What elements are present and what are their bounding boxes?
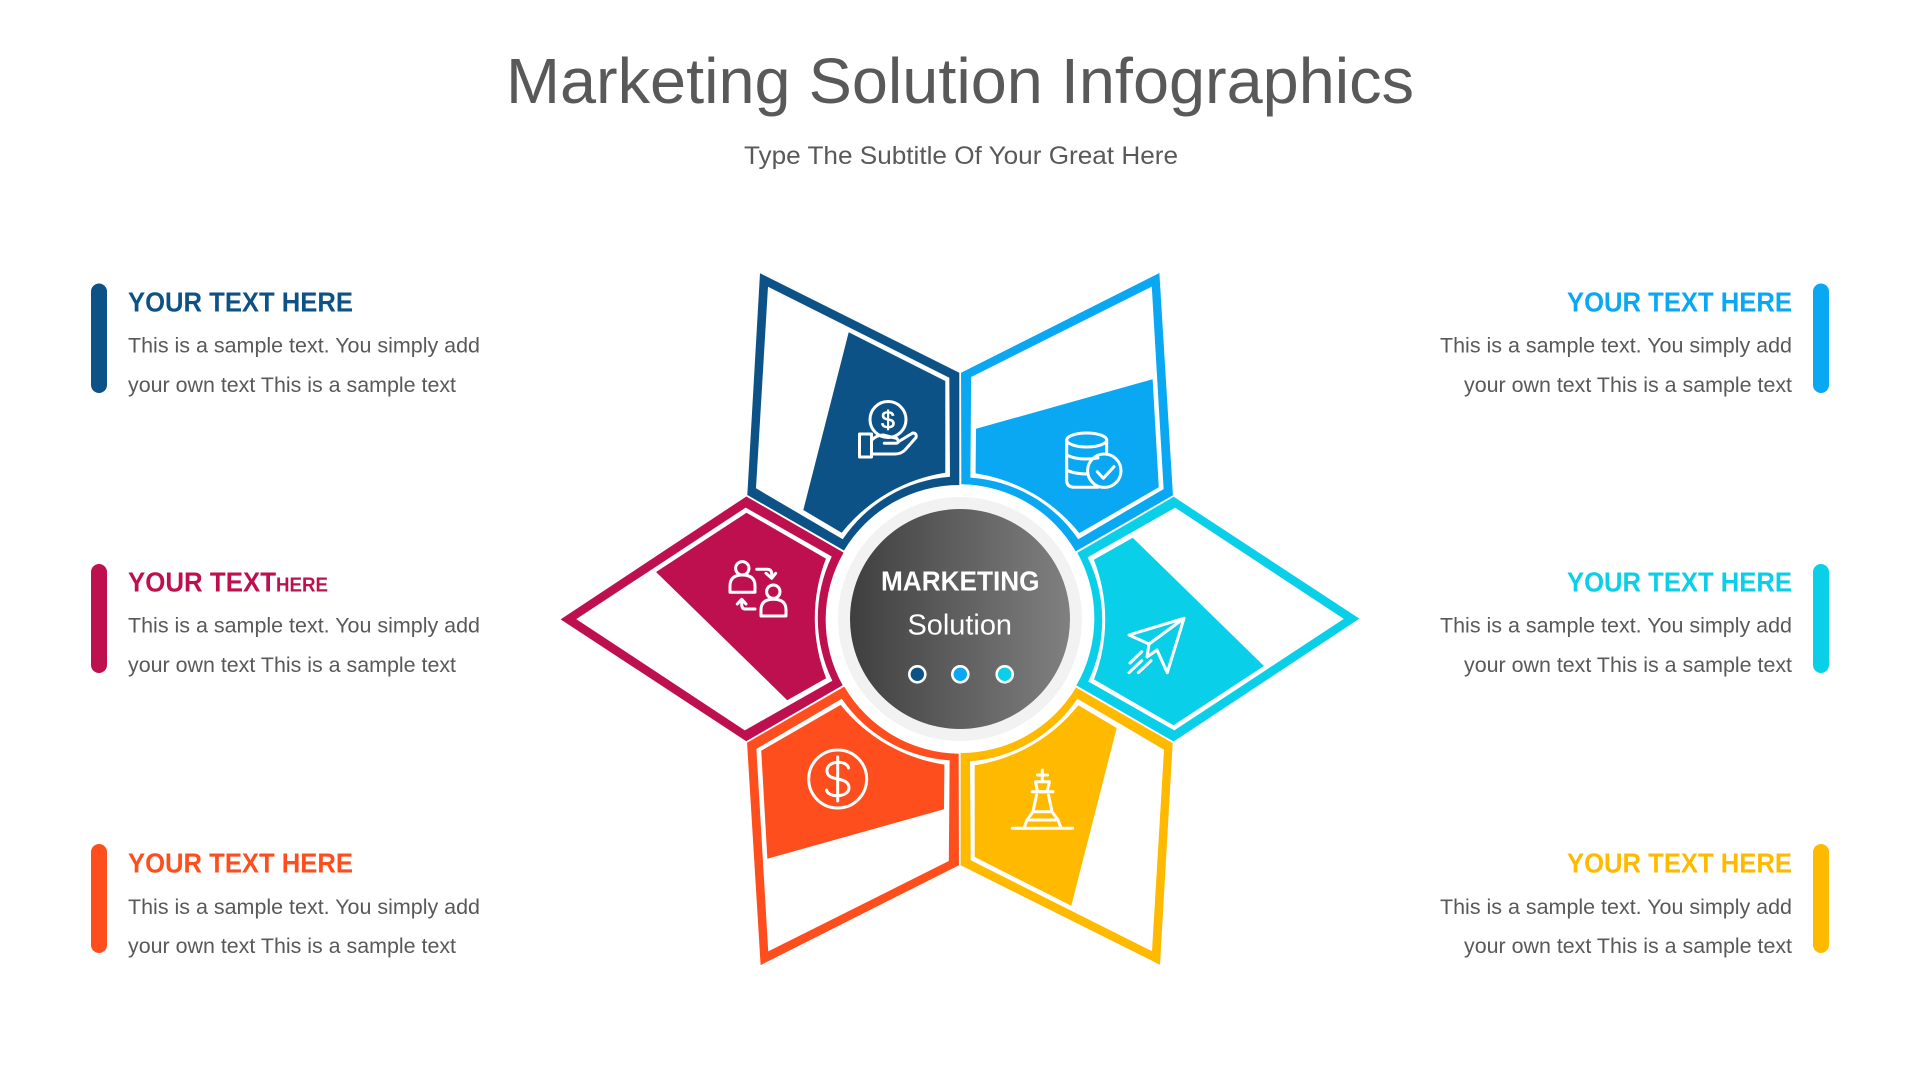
body line 2: your own text This is a sample text	[128, 654, 456, 677]
body line 1: This is a sample text. You simply add	[1440, 896, 1792, 919]
petal: top right, light blue	[913, 262, 1259, 584]
panel: left text block 3	[91, 844, 480, 958]
icon: people exchange	[730, 562, 786, 616]
accent bar	[91, 284, 107, 393]
panel: right text block 3	[1440, 844, 1829, 958]
icon: chess king	[1012, 770, 1073, 828]
gradient disc	[850, 509, 1070, 729]
title: Marketing Solution Infographics	[506, 45, 1414, 117]
accent bar	[91, 844, 107, 953]
hub subtitle: Solution	[908, 609, 1012, 641]
accent bar	[91, 564, 107, 673]
body line 1: This is a sample text. You simply add	[1440, 335, 1792, 358]
subtitle: Type The Subtitle Of Your Great Here	[744, 142, 1178, 170]
panel: right text block 1	[1440, 284, 1829, 397]
icon: paper plane	[1129, 618, 1184, 673]
body line 2: your own text This is a sample text	[1464, 654, 1792, 677]
icon: coin in hand	[860, 402, 916, 457]
body line 2: your own text This is a sample text	[1464, 935, 1792, 958]
body line 1: This is a sample text. You simply add	[128, 896, 480, 919]
heading: YOUR TEXT HERE	[1567, 287, 1792, 318]
body line 2: your own text This is a sample text	[128, 374, 456, 397]
icon: coin in hand: $	[881, 406, 895, 434]
icon: dollar coin	[809, 750, 867, 808]
body line 1: This is a sample text. You simply add	[128, 335, 480, 358]
heading: YOUR TEXTHERE	[128, 567, 328, 598]
petal: left, crimson	[554, 447, 900, 769]
body line 1: This is a sample text. You simply add	[1440, 615, 1792, 638]
dots	[909, 666, 1013, 682]
accent bar	[1813, 564, 1829, 673]
panel: left text block 2	[91, 564, 480, 677]
accent bar	[1813, 284, 1829, 393]
heading: YOUR TEXT HERE	[128, 287, 353, 318]
icon: database with check	[1067, 433, 1121, 487]
center hub	[827, 486, 1093, 752]
body line 2: your own text This is a sample text	[1464, 374, 1792, 397]
petal: right, cyan	[1020, 469, 1366, 791]
panel: left text block 1	[91, 284, 480, 397]
petal: top left, dark blue	[747, 273, 959, 550]
petal: bottom left, orange	[661, 654, 1007, 976]
accent bar	[1813, 844, 1829, 953]
body line 1: This is a sample text. You simply add	[128, 615, 480, 638]
heading: YOUR TEXT HERE	[1567, 567, 1792, 598]
body line 2: your own text This is a sample text	[128, 935, 456, 958]
heading: YOUR TEXT HERE	[128, 848, 353, 879]
hub title: MARKETING	[881, 566, 1040, 597]
petal: bottom right, yellow	[961, 688, 1173, 965]
heading: YOUR TEXT HERE	[1567, 848, 1792, 879]
panel: right text block 2	[1440, 564, 1829, 677]
